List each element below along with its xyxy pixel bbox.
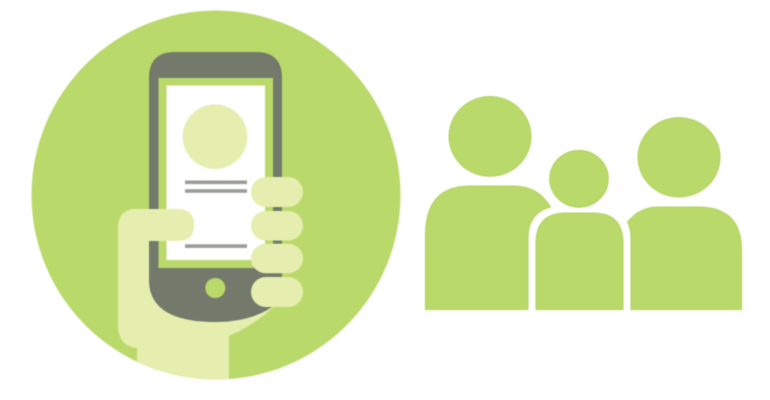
green circle background — [32, 10, 400, 380]
icon: hand palm and wrist — [118, 210, 273, 380]
icon: thumb — [130, 209, 194, 241]
panel: phone in hand — [32, 10, 400, 400]
adult one — [426, 96, 550, 309]
phone screen — [166, 86, 265, 260]
adult two — [628, 118, 742, 310]
home button — [205, 278, 225, 298]
phone screen border — [158, 78, 273, 268]
panel: family icon — [426, 96, 742, 309]
child — [536, 150, 623, 310]
text lines — [185, 180, 247, 248]
phone body — [149, 52, 282, 322]
profile picture circle — [183, 104, 247, 169]
icon: smartphone — [149, 52, 282, 322]
icon: fingers — [251, 177, 303, 307]
